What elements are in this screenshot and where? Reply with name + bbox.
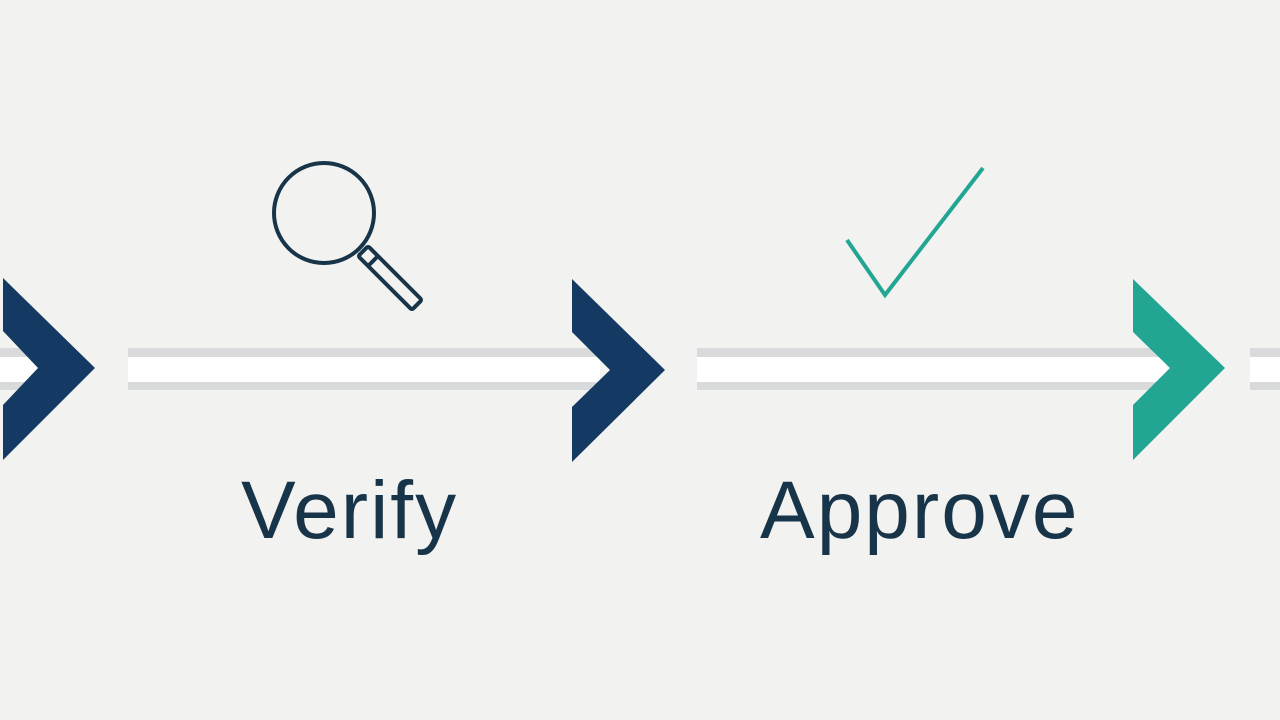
label: Verify: Verify — [241, 465, 458, 556]
label: Approve: Approve — [760, 465, 1079, 556]
icon: magnifying glass — [274, 163, 422, 310]
connector bar 1 — [128, 348, 600, 390]
chevron arrow middle — [572, 279, 665, 462]
chevron arrow left — [3, 278, 95, 460]
icon: check mark — [847, 168, 983, 295]
connector bar left — [0, 348, 40, 390]
chevron arrow teal — [1133, 279, 1225, 460]
connector bar right — [1250, 348, 1280, 390]
connector bar 2 — [697, 348, 1167, 390]
